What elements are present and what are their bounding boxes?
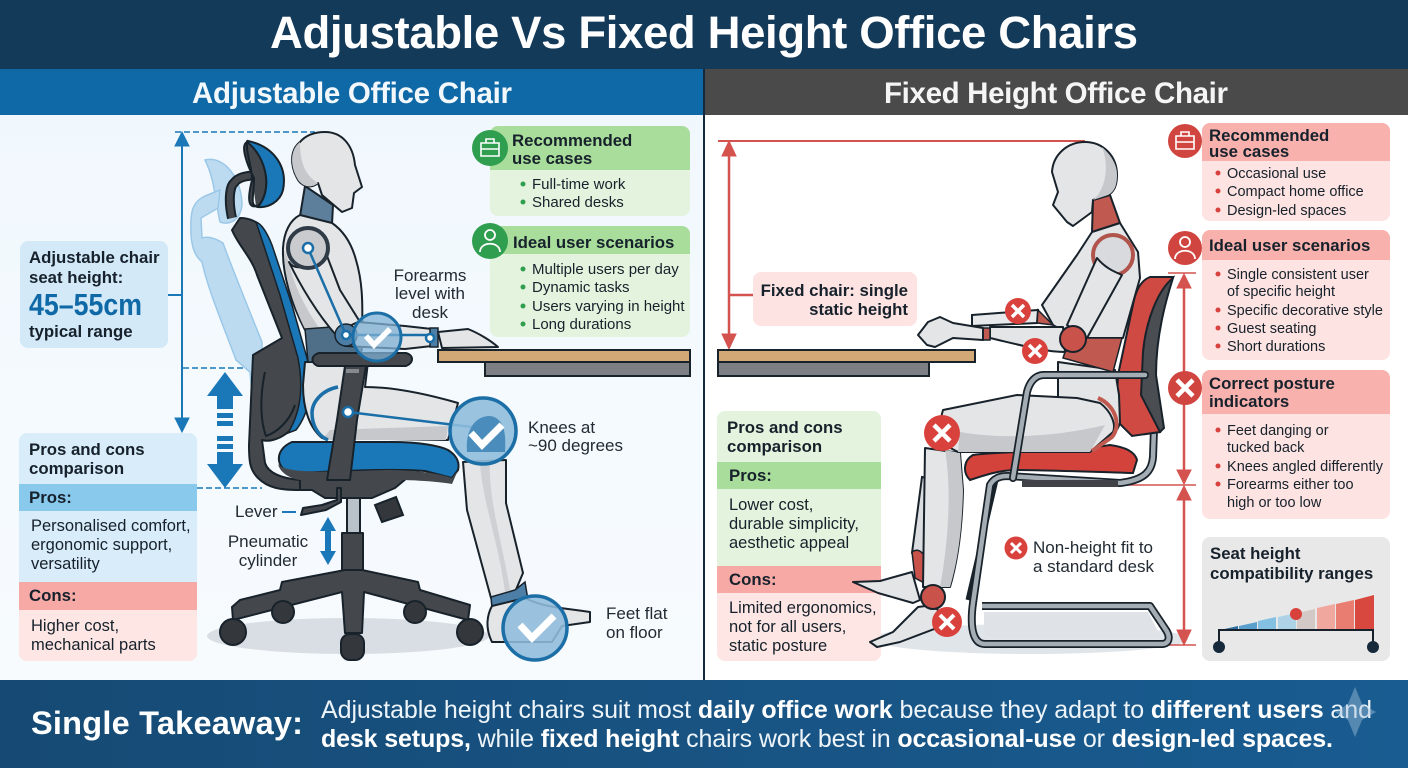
label: non-height fit	[1004, 536, 1154, 576]
x marker: far arm	[1005, 298, 1031, 324]
panel backgrounds	[0, 69, 1408, 680]
head	[292, 132, 362, 212]
panel: correct posture indicators: Feet danging or	[1227, 423, 1329, 439]
panel: correct posture indicators	[1202, 370, 1390, 519]
label: forearms level	[394, 266, 466, 322]
backrest frame and lumbar	[232, 218, 310, 490]
height adjustment double arrow	[207, 372, 243, 488]
left height dimension lines	[168, 132, 315, 488]
fixed figure	[853, 142, 1145, 647]
panel: fixed ideal user scenarios: Guest seating	[1227, 321, 1316, 337]
panel: adjustable pros and cons: ergonomic support,	[31, 536, 172, 554]
panel: adjustable ideal user scenarios: Users varying in height	[532, 298, 685, 315]
panel: correct posture indicators: Knees angled differently	[1227, 459, 1384, 475]
neck	[1092, 195, 1120, 232]
panel: adjustable pros and cons: mechanical parts	[31, 636, 156, 654]
label: feet: on floor	[606, 623, 663, 642]
takeaway banner	[0, 680, 1408, 768]
icon: red x	[1168, 371, 1202, 405]
thigh	[935, 395, 1114, 452]
panel: adjustable pros and cons: comparison	[29, 459, 124, 478]
panel: fixed pros and cons: Cons:	[729, 570, 777, 589]
far foot	[853, 572, 920, 603]
panel: correct posture indicators: Forearms either too	[1227, 477, 1354, 493]
panel: fixed pros and cons: Limited ergonomics,	[729, 599, 877, 617]
label: knees	[528, 418, 623, 455]
title	[0, 0, 1408, 69]
panel: adjustable recommended use cases: Shared desks	[532, 194, 624, 211]
label: forearms level: Forearms	[394, 266, 466, 285]
far ankle	[912, 550, 928, 585]
elbow	[1060, 326, 1086, 352]
panel: fixed ideal user scenarios: of specific height	[1227, 284, 1335, 300]
foot	[487, 598, 590, 642]
panel: correct posture indicators: tucked back	[1227, 440, 1305, 456]
label: non-height fit: a standard desk	[1033, 557, 1154, 576]
panel: adjustable ideal user scenarios: Dynamic tasks	[532, 279, 630, 296]
armrest	[312, 353, 412, 366]
wrist	[983, 328, 990, 340]
label: lever	[235, 502, 296, 521]
backrest	[1116, 277, 1173, 436]
fixed chair	[965, 277, 1173, 644]
panel: fixed pros and cons	[717, 411, 881, 661]
upper arm	[1067, 258, 1122, 338]
heading: fixed height office chair: Fixed Height Office Chair	[884, 77, 1229, 110]
panel: fixed pros and cons: static posture	[729, 637, 827, 655]
title: Adjustable Vs Fixed Height Office Chairs	[270, 7, 1138, 58]
callout: fixed chair single height: Fixed chair: single	[761, 281, 908, 300]
panel: fixed ideal user scenarios	[1202, 230, 1390, 360]
callout: adjustable seat height	[20, 241, 168, 348]
near foot	[870, 605, 950, 647]
lower leg	[463, 460, 523, 598]
callout: fixed chair single height	[753, 272, 917, 326]
panel: fixed recommended use cases: Compact home office	[1227, 184, 1364, 200]
label: forearms level: level with	[395, 284, 465, 303]
shoulder joint	[288, 228, 328, 268]
panel: adjustable recommended use cases: Recommended	[512, 131, 632, 150]
seat cushion	[279, 442, 459, 478]
panel: seat height compatibility ranges	[1202, 537, 1390, 661]
panel: correct posture indicators: Correct posture	[1209, 374, 1335, 393]
icon: green user	[472, 223, 508, 259]
panel: adjustable pros and cons: Personalised comfort,	[31, 517, 191, 535]
label: feet	[606, 604, 668, 642]
torso back shading	[284, 250, 320, 329]
far lower leg	[912, 477, 935, 560]
headrest	[230, 141, 284, 218]
panel: adjustable pros and cons: Cons:	[29, 586, 77, 605]
label: forearms level: desk	[412, 303, 448, 322]
panel: fixed ideal user scenarios: Single consistent user	[1227, 267, 1369, 283]
label: lever: Lever	[235, 502, 278, 521]
panel: fixed ideal user scenarios: Short durations	[1227, 339, 1325, 355]
sled frame	[968, 400, 1169, 644]
waist band	[1063, 338, 1122, 372]
panel: correct posture indicators: indicators	[1209, 392, 1289, 411]
panel: seat height compatibility ranges: compatibility ranges	[1210, 564, 1373, 583]
panel: fixed recommended use cases	[1202, 123, 1390, 221]
panel: fixed pros and cons: comparison	[727, 437, 822, 456]
forearm	[990, 327, 1065, 352]
seat mechanism and lever	[300, 478, 407, 522]
panel: fixed pros and cons: Pros:	[729, 466, 772, 485]
forearm	[345, 322, 432, 349]
lower leg	[923, 448, 963, 587]
takeaway banner: desk setups, while fixed height chairs work best in occasional-use or design-led spaces.	[321, 725, 1333, 753]
elbow	[335, 324, 357, 346]
label: knees: ~90 degrees	[528, 436, 623, 455]
panel: fixed ideal user scenarios: Ideal user scenarios	[1209, 236, 1370, 255]
panel: seat height compatibility ranges: Seat height	[1210, 544, 1301, 563]
panel: adjustable pros and cons: Pros and cons	[29, 440, 145, 459]
label: pneumatic cylinder: Pneumatic	[228, 532, 309, 551]
panel: fixed recommended use cases: Occasional use	[1227, 166, 1326, 182]
lumbar band	[305, 322, 362, 362]
hand	[438, 329, 498, 348]
seat base and cylinder	[220, 497, 483, 660]
x marker: knee	[924, 415, 960, 451]
panel: adjustable recommended use cases	[490, 126, 690, 216]
icon: red user	[1168, 231, 1202, 265]
panel: adjustable ideal user scenarios	[490, 226, 690, 337]
adjustable chair	[220, 141, 483, 660]
seat	[965, 445, 1137, 480]
floor shadow	[207, 618, 489, 654]
callout: adjustable seat height: typical range	[29, 322, 133, 341]
neck	[300, 186, 333, 224]
panel: adjustable pros and cons: Higher cost,	[31, 617, 119, 635]
lower torso and thigh	[303, 362, 458, 440]
check badge: feet	[503, 596, 567, 660]
heading: adjustable office chair	[0, 69, 703, 115]
panel: fixed pros and cons: not for all users,	[729, 618, 846, 636]
x marker: ankle	[932, 607, 962, 637]
icon: green briefcase	[472, 130, 508, 166]
panel: fixed pros and cons: aesthetic appeal	[729, 534, 849, 552]
callout: adjustable seat height: 45–55cm	[29, 287, 142, 322]
check badge: knee	[450, 398, 516, 464]
ankle joint	[921, 585, 945, 609]
label: pneumatic cylinder	[228, 532, 309, 570]
panel: adjustable ideal user scenarios: Multiple users per day	[532, 261, 679, 278]
heading: fixed height office chair	[705, 69, 1408, 115]
icon: red briefcase	[1168, 124, 1202, 158]
arrow: cylinder travel	[320, 517, 336, 565]
callout: fixed chair single height: static height	[809, 300, 908, 319]
label: pneumatic cylinder: cylinder	[239, 551, 298, 570]
panel: fixed recommended use cases: use cases	[1209, 142, 1289, 161]
callout: adjustable seat height: Adjustable chair	[29, 248, 160, 267]
right desk	[718, 350, 975, 376]
hand	[918, 317, 983, 347]
panel: correct posture indicators: high or too low	[1227, 495, 1322, 511]
label: feet: Feet flat	[606, 604, 668, 623]
panel: fixed ideal user scenarios: Specific decorative style	[1227, 303, 1383, 319]
panel: fixed pros and cons: Lower cost,	[729, 496, 813, 514]
head	[1052, 142, 1117, 226]
takeaway banner: Single Takeaway:	[31, 705, 303, 741]
label: knees: Knees at	[528, 418, 595, 437]
panel: fixed recommended use cases: Recommended	[1209, 126, 1329, 145]
lower back	[1058, 362, 1120, 448]
callout: adjustable seat height: seat height:	[29, 268, 123, 287]
upper arm	[289, 256, 360, 335]
panel: fixed recommended use cases: Design-led spaces	[1227, 203, 1346, 219]
far elbow	[1037, 310, 1053, 325]
range chart	[1213, 595, 1379, 653]
right floor shadow	[872, 624, 1188, 654]
panel: adjustable pros and cons: versatility	[31, 555, 101, 573]
shoulder ring	[1093, 235, 1133, 275]
right dimension lines	[718, 141, 1196, 645]
sled base fill	[984, 612, 1161, 637]
takeaway banner: Adjustable height chairs suit most daily office work because they adapt to different users and	[321, 696, 1372, 724]
under seat bar	[1022, 480, 1118, 487]
sparkle	[1335, 687, 1376, 737]
joint lines	[303, 243, 480, 428]
wrist	[430, 328, 438, 347]
panel: adjustable recommended use cases: Full-time work	[532, 176, 626, 193]
torso	[283, 215, 362, 330]
adjustable figure	[278, 132, 590, 642]
seat underside	[278, 464, 458, 484]
heading: adjustable office chair: Adjustable Office Chair	[192, 77, 513, 110]
panel: fixed pros and cons: durable simplicity,	[729, 515, 859, 533]
ankle	[491, 582, 528, 612]
x marker: near arm	[1022, 338, 1048, 364]
far arm	[972, 310, 1038, 326]
torso	[1042, 223, 1140, 338]
hip arc	[312, 387, 338, 440]
ghost chair position	[191, 159, 262, 430]
panel: adjustable pros and cons	[19, 433, 197, 661]
panel: adjustable pros and cons: Pros:	[29, 488, 72, 507]
label: non-height fit: Non-height fit to	[1033, 538, 1153, 557]
panel: adjustable recommended use cases: use cases	[512, 149, 592, 168]
panel: fixed pros and cons: Pros and cons	[727, 418, 843, 437]
left desk	[438, 350, 690, 376]
panel: adjustable ideal user scenarios: Long durations	[532, 316, 631, 333]
check badge: forearm	[353, 313, 401, 361]
panel: adjustable ideal user scenarios: Ideal user scenarios	[513, 233, 674, 252]
arm rest	[1013, 375, 1145, 478]
